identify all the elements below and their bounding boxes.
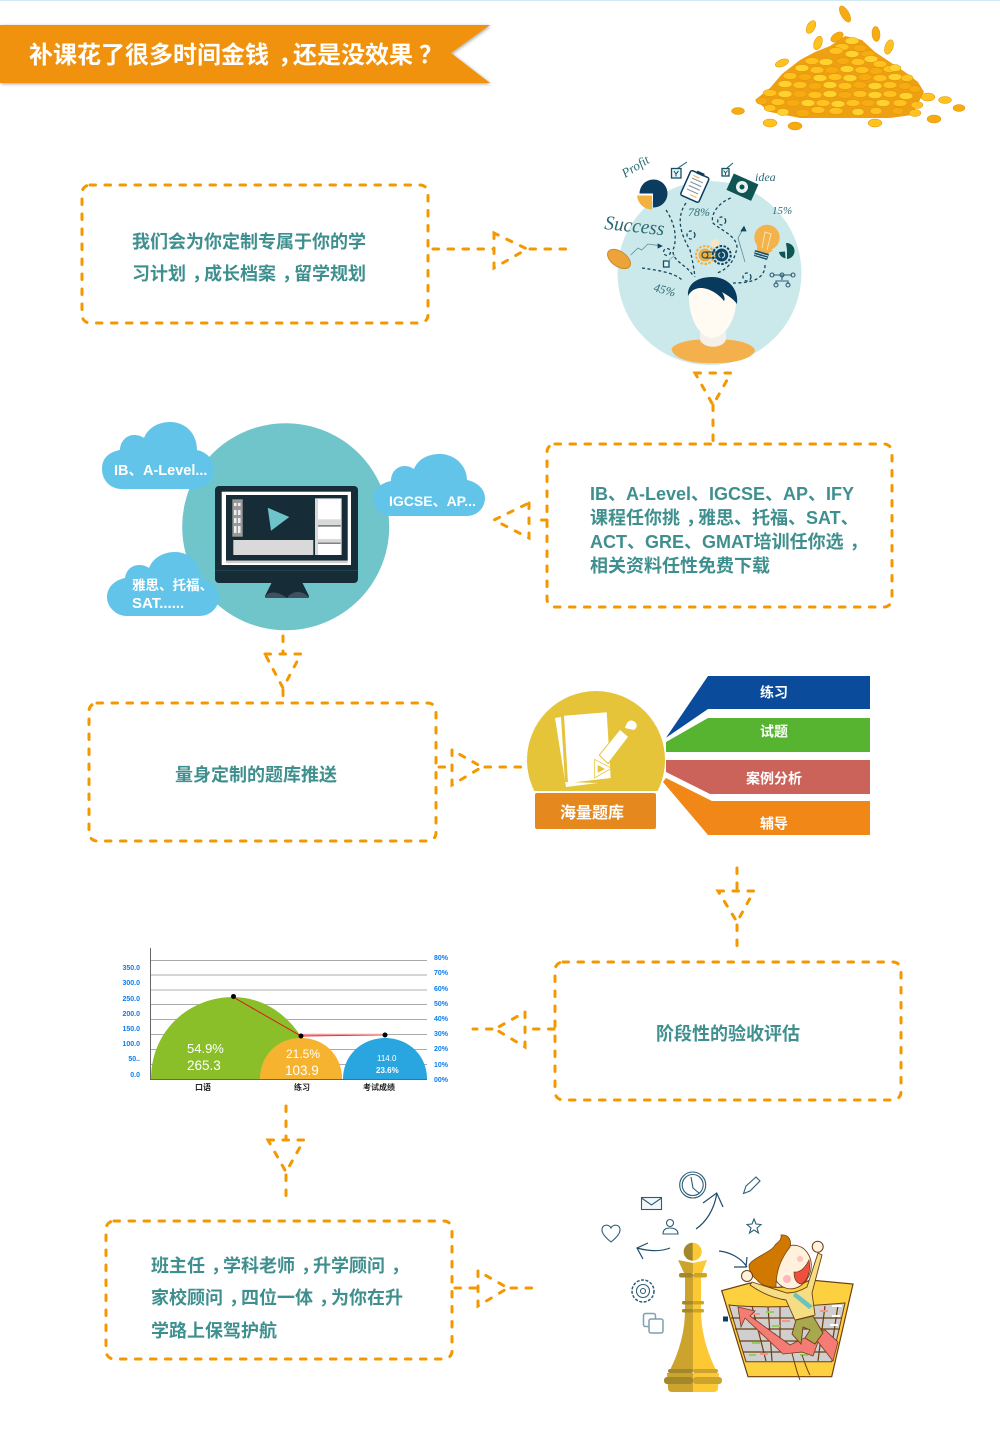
bar: test questions [666, 718, 870, 752]
cloud: IGCSE AP [373, 454, 485, 516]
text: support team: ， [229, 1288, 247, 1308]
icon: pie chart [637, 180, 668, 210]
category labels: 练习 [294, 1082, 310, 1092]
text: support team: ， [319, 1288, 337, 1308]
arrow: chart to support team [268, 1106, 304, 1202]
left axis labels: 150.0 [122, 1026, 140, 1033]
cloud: IELTS TOEFL SAT [107, 552, 219, 616]
bar: case analysis [666, 760, 870, 794]
icon: clock [680, 1172, 706, 1198]
right axis labels: 10% [434, 1062, 449, 1069]
semicircle: practice: 103.9 [285, 1063, 319, 1078]
left axis labels: 100.0 [122, 1041, 140, 1048]
text: personal plan: ， [192, 264, 210, 284]
icon: heart [602, 1225, 620, 1242]
text: courses: 课程任你挑 [590, 508, 680, 528]
text: courses: ACT、GRE、GMAT培训任你选 [590, 531, 844, 552]
text: support team: 学科老师 [223, 1255, 295, 1276]
icon: gold coin [604, 245, 634, 273]
label: hand-written words: idea [755, 170, 776, 184]
illustration: strategy and success [602, 1172, 853, 1392]
left axis labels: 50.. [128, 1056, 140, 1063]
category labels: 口语 [195, 1082, 211, 1092]
right axis labels: 70% [434, 970, 449, 977]
text: courses: ， [850, 532, 868, 552]
panel: personal plan text box [82, 185, 428, 323]
text: support team: ， [211, 1256, 229, 1276]
icon: small pie [779, 243, 795, 259]
label: question bank [535, 793, 656, 829]
panel: support team text box [106, 1221, 452, 1359]
label: hand-written words [603, 152, 792, 300]
right axis labels: 80% [434, 955, 449, 962]
illustration: cartoon riding stock chart [722, 1235, 853, 1380]
text: support team: ， [301, 1256, 319, 1276]
text: support team: 学路上保驾护航 [151, 1320, 277, 1341]
icon: envelope [642, 1198, 662, 1210]
bar: practice [666, 676, 870, 738]
right axis labels: 30% [434, 1031, 449, 1038]
bar: tutoring: 辅导 [760, 816, 788, 832]
label: question bank: 海量题库 [560, 804, 624, 822]
text: personal plan: 留学规划 [294, 263, 366, 284]
label: hand-written words: 15% [772, 205, 792, 217]
category labels: 考试成绩 [363, 1082, 395, 1092]
icon: pencil [744, 1177, 760, 1194]
text: support team: ， [391, 1256, 409, 1276]
semicircle: exam score: 23.6% [376, 1066, 399, 1075]
line series [231, 994, 388, 1038]
cloud: IELTS TOEFL SAT: 雅思、托福、 [132, 577, 213, 593]
arrow: plan to thinker [433, 233, 575, 268]
text: support team: 四位一体 [241, 1287, 313, 1308]
chart: score composition [122, 948, 449, 1092]
icon: light bulb [754, 225, 780, 260]
text: personal plan: 我们会为你定制专属于你的学 [132, 231, 366, 252]
text: support team: 升学顾问 [313, 1255, 385, 1276]
semicircle: oral: 54.9% [187, 1041, 224, 1056]
cloud: IB A-Level: IB、A-Level... [114, 463, 207, 479]
icon: gears [696, 239, 731, 264]
label: hand-written words: Profit [618, 152, 652, 181]
panel: assessment text box [555, 962, 901, 1100]
right axis labels: 40% [434, 1016, 449, 1023]
label: hand-written words: 78% [688, 205, 710, 219]
dashed thought paths [642, 198, 765, 283]
arrow: assessment to chart [473, 1012, 554, 1047]
bar: tutoring [663, 778, 870, 835]
title banner [0, 25, 490, 83]
semicircle: practice: 21.5% [286, 1047, 320, 1061]
arrow: support team to illustration [455, 1271, 535, 1306]
arrow: thinker to courses [695, 373, 731, 444]
left axis labels: 200.0 [122, 1011, 140, 1018]
right axis labels: 20% [434, 1046, 449, 1053]
arrows: curved directions [637, 1193, 747, 1267]
right axis labels [434, 955, 449, 1084]
bar: case analysis: 案例分析 [746, 770, 802, 786]
text: personal plan: 成长档案 [204, 263, 276, 284]
label: hand-written words: Success [603, 212, 666, 240]
left axis labels: 300.0 [122, 980, 140, 987]
text: courses: 雅思、托福、SAT、 [698, 508, 859, 528]
icon: checklist clipboard [680, 168, 710, 203]
illustration: online course monitor [102, 422, 485, 630]
figure: person silhouette [672, 277, 755, 363]
arrow: monitor to question bank [265, 636, 301, 703]
left axis labels: 0.0 [130, 1072, 140, 1079]
arrow: courses to monitor [494, 503, 547, 538]
diagram: question bank [527, 676, 870, 835]
text: assessment: 阶段性的验收评估 [656, 1023, 800, 1044]
cloud: IELTS TOEFL SAT: SAT...... [132, 595, 184, 612]
icon: notebook and pencil [527, 691, 665, 791]
icon: gear [632, 1280, 654, 1302]
text: support team: 为你在升 [331, 1288, 403, 1308]
bar: test questions: 试题 [760, 724, 788, 740]
text: support team: 班主任 [151, 1256, 205, 1276]
text: courses: 相关资料任性免费下载 [590, 555, 770, 576]
icon: check boxes [664, 162, 733, 267]
icon: person [663, 1220, 678, 1234]
text: courses: ， [686, 508, 704, 528]
icon: trend arrows [631, 226, 746, 262]
icon: star [747, 1219, 761, 1233]
arrow: question bank to assessment [718, 868, 754, 948]
semicircle: practice [260, 1038, 342, 1079]
semicircle: exam score: 114.0 [377, 1054, 397, 1063]
bar: practice: 练习 [760, 684, 788, 700]
icon: pile of gold coins [732, 4, 965, 130]
icon: copy squares [644, 1314, 663, 1333]
category labels [195, 1082, 395, 1092]
left axis labels [122, 965, 140, 1079]
panel: question bank text box [89, 703, 436, 841]
semicircle: exam score [343, 1038, 427, 1079]
right axis labels: 60% [434, 986, 449, 993]
icon: network nodes [770, 273, 795, 287]
semicircle: oral: 265.3 [187, 1058, 221, 1073]
left axis labels: 250.0 [122, 996, 140, 1003]
panel: courses text box [547, 444, 892, 607]
illustration: person with ideas [603, 152, 802, 365]
icon: chess king piece [664, 1243, 722, 1392]
title: 补课花了很多时间金钱 ，还是没效果？ [29, 41, 443, 69]
arrow: text to question bank [439, 750, 522, 785]
cloud: IGCSE AP: IGCSE、AP... [389, 493, 476, 509]
text: support team: 家校顾问 [151, 1287, 223, 1308]
left axis labels: 350.0 [122, 965, 140, 972]
text: question bank push: 量身定制的题库推送 [175, 764, 337, 785]
text: personal plan: ， [282, 264, 300, 284]
semicircle: oral [151, 997, 303, 1079]
text: courses: IB、A-Level、IGCSE、AP、IFY [590, 484, 854, 504]
right axis labels: 50% [434, 1001, 449, 1008]
right axis labels: 00% [434, 1077, 449, 1084]
icon: desktop monitor [215, 486, 358, 598]
cloud: IB A-Level [102, 422, 214, 489]
label: hand-written words: 45% [652, 280, 677, 300]
text: personal plan: 习计划 [132, 264, 186, 284]
icon: banknote [726, 173, 758, 201]
